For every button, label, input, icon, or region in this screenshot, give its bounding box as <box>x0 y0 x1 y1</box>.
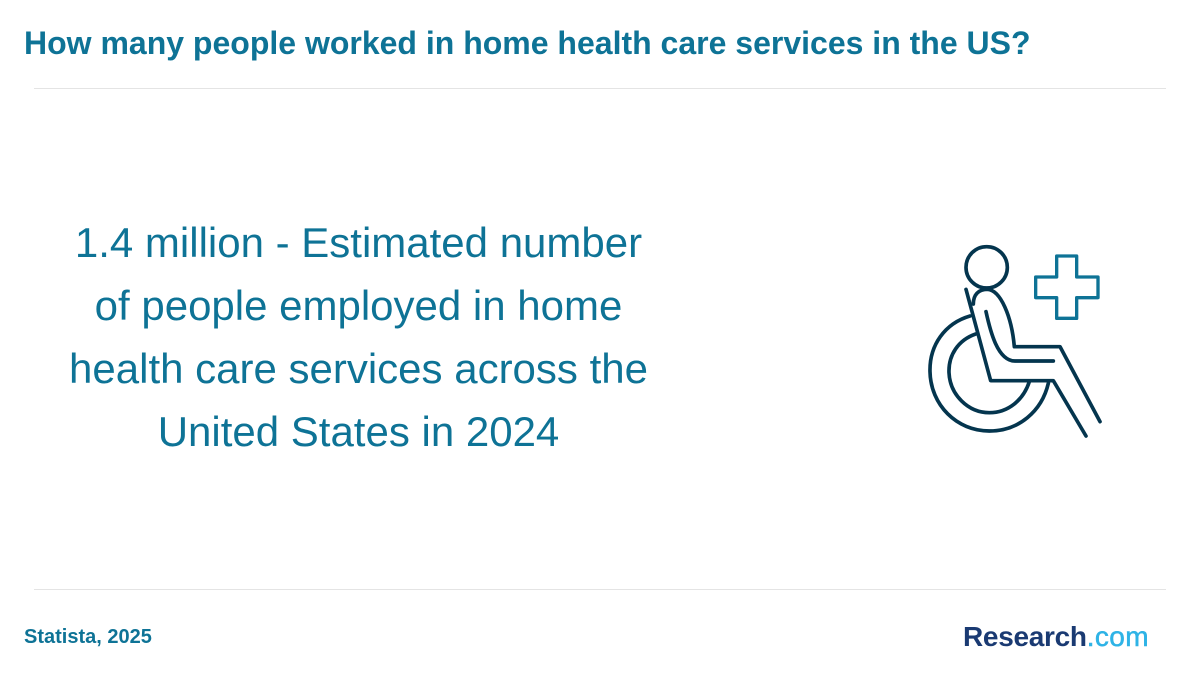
main statement <box>69 219 648 455</box>
main statement: of people employed in home <box>95 282 622 329</box>
main statement: 1.4 million - Estimated number <box>75 219 642 266</box>
source: Statista, 2025 <box>24 626 152 648</box>
title: How many people worked in home health care services in the US? <box>24 25 1031 61</box>
main statement: United States in 2024 <box>158 408 559 455</box>
icon: medical cross <box>1036 256 1098 318</box>
icon: wheelchair user <box>930 247 1100 436</box>
icon: person in wheelchair with medical cross <box>928 244 1102 438</box>
main statement: health care services across the <box>69 345 648 392</box>
logo: Research.com: Research.com <box>963 621 1149 652</box>
